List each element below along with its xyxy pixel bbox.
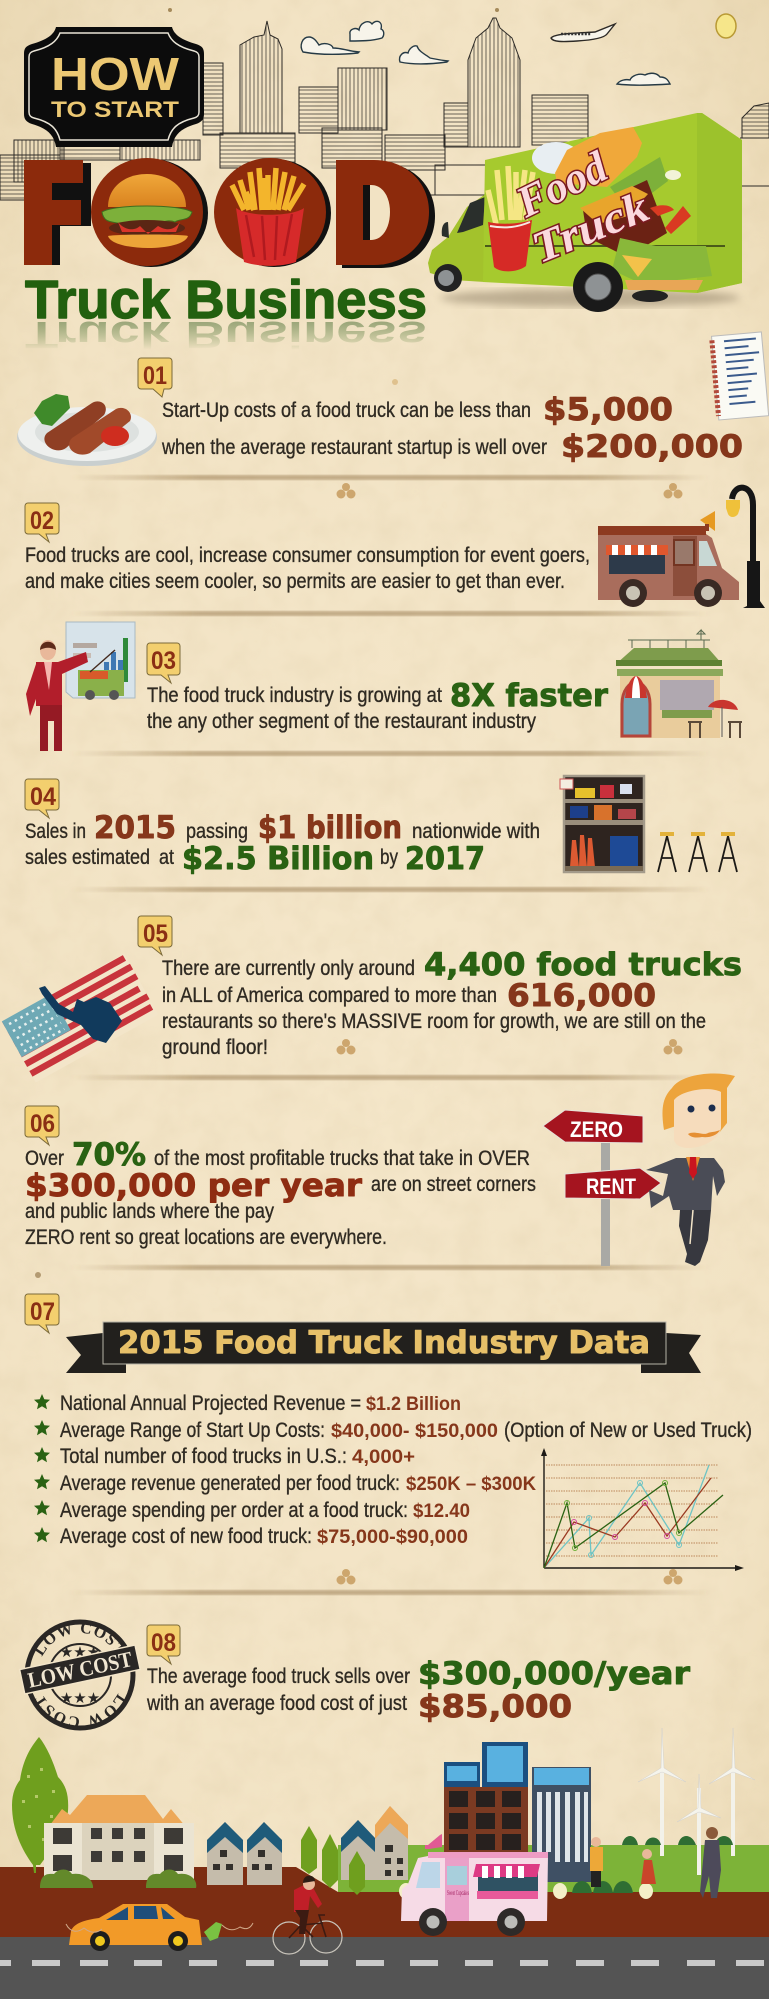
bullet list: 4,000+ — [352, 1447, 415, 1468]
text: sales line 1: $1 billion — [258, 810, 402, 846]
letter O with burger — [91, 158, 208, 267]
road dashes — [0, 1960, 764, 1966]
text: sales line 1: nationwide with — [412, 819, 540, 843]
icon: low cost stamp — [19, 1620, 140, 1730]
text: profit lines 2 to 4: ZERO rent so great locations are everywhere. — [25, 1225, 387, 1249]
text: growth line 2: the any other segment of the restaurant industry — [147, 709, 536, 733]
illustration: food truck — [428, 113, 742, 312]
icon: chart sheet — [66, 622, 135, 700]
bullet list: $12.40 — [413, 1501, 470, 1522]
city skyline sketch — [0, 18, 769, 200]
badge 07: 07 — [30, 1298, 55, 1326]
number: 5,000: $5,000 — [543, 392, 673, 428]
icon: restaurant — [616, 630, 742, 738]
text: sales line 2: sales estimated — [25, 845, 150, 869]
title words: truck business: Truck Business — [25, 314, 427, 356]
bullet list: $250K – $300K — [406, 1474, 536, 1495]
text: sales line 2: 2017 — [405, 841, 485, 877]
number: 85,000: $85,000 — [418, 1689, 572, 1725]
icon: stools — [658, 834, 737, 872]
text: profit line 1: 70% — [72, 1137, 146, 1173]
cyclist — [273, 1876, 342, 1954]
letter D — [336, 160, 435, 268]
badge 08: 08 — [151, 1629, 176, 1657]
text: permits: and make cities seem cooler, so permits are easier to get than ever. — [25, 569, 565, 593]
badge 05: 05 — [143, 920, 168, 948]
title word: FOOD — [24, 158, 435, 268]
line chart — [541, 1448, 744, 1571]
bullet list — [34, 1391, 752, 1548]
panel: 02 permits — [25, 488, 765, 608]
badge 01 — [138, 358, 172, 397]
panel: 04 sales — [25, 776, 737, 877]
title badge: how to start — [24, 27, 204, 147]
number: 616,000: 616,000 — [507, 978, 656, 1014]
truck wheels — [434, 262, 668, 312]
banner heading — [66, 1322, 701, 1373]
bullet list: National Annual Projected Revenue = — [60, 1391, 361, 1415]
pink food truck: Sweet Cupcakes — [447, 1889, 469, 1897]
badge 07 — [25, 1294, 59, 1333]
bullet stars — [34, 1394, 50, 1542]
text: sales line 2: by — [380, 845, 398, 869]
text: market line 3 and 4 — [162, 1009, 706, 1059]
badge 08 — [147, 1625, 180, 1664]
hedges and people — [399, 1827, 733, 1899]
banner heading: 2015 Food Truck Industry Data — [118, 1325, 650, 1361]
dividers — [70, 475, 710, 1595]
truck lettering — [508, 141, 656, 273]
title words: truck business: Truck Business — [25, 270, 427, 330]
icon: notepad — [712, 332, 769, 420]
panel: 06 profit — [25, 1073, 735, 1266]
icon: street lamp — [726, 488, 765, 608]
truck lettering: Food — [508, 141, 616, 228]
wind turbines — [638, 1728, 755, 1875]
badge 01: 01 — [143, 362, 167, 390]
badge 04: 04 — [30, 783, 56, 811]
icon: signpost — [543, 1110, 661, 1266]
text: market line 3 and 4: ground floor! — [162, 1035, 268, 1059]
number: 200,000: $200,000 — [561, 429, 743, 465]
text: market line 2: in ALL of America compared to more than — [162, 983, 497, 1007]
icon: businessman — [646, 1073, 735, 1266]
clouds, plane and sun — [301, 14, 736, 85]
bullet list: Total number of food trucks in U.S.: — [60, 1444, 347, 1468]
grass — [338, 1845, 769, 1895]
icon: american flag with statue of liberty — [2, 953, 158, 1083]
badge 03 — [147, 643, 180, 683]
text: sales line 1 — [25, 810, 540, 846]
small trees — [301, 1826, 365, 1895]
text: sales line 2 — [25, 841, 485, 877]
text: profit lines 2 to 4: and public lands where the pay — [25, 1199, 274, 1223]
icon: signpost: ZERO — [570, 1117, 623, 1142]
truck lettering: Truck — [525, 182, 656, 273]
cup and fries art — [488, 166, 533, 271]
icon: presenter — [26, 640, 115, 751]
panel: 08 food cost — [19, 1620, 691, 1730]
text: sales line 1: passing — [186, 819, 248, 843]
icon: brown food truck — [598, 511, 739, 607]
text: sales line 1: 2015 — [94, 810, 176, 846]
text: profit lines 2 to 4: are on street corners — [371, 1172, 536, 1196]
number: 300,000 per year: $300,000 per year — [25, 1168, 363, 1204]
badge 02 — [25, 503, 59, 542]
icon: shelves — [560, 776, 644, 872]
number: 300,000 per year: $300,000/year — [418, 1656, 691, 1692]
icon: signpost: RENT — [586, 1174, 636, 1199]
badge 06: 06 — [30, 1110, 55, 1138]
icon: low cost stamp: ★★★ — [60, 1689, 100, 1707]
text: sales line 2: at — [159, 845, 174, 869]
icon: low cost stamp: LOW COST — [25, 1646, 135, 1693]
bullet list: Average spending per order at a food truck: — [60, 1498, 408, 1522]
burger art — [532, 127, 712, 290]
panel: 07 industry data — [25, 1294, 752, 1571]
small houses — [207, 1806, 408, 1885]
text: startup cost line 1: Start-Up costs of a food truck can be less than — [162, 398, 531, 422]
number: 8x faster: 8X faster — [450, 678, 609, 714]
road — [0, 1937, 769, 1999]
panel: 01 startup costs — [17, 332, 769, 466]
big tree — [12, 1737, 68, 1873]
text: growth line 1: The food truck industry is growing at — [147, 683, 442, 707]
ground — [0, 1867, 769, 1938]
panel: 05 market size — [2, 916, 742, 1083]
badge 03: 03 — [151, 647, 176, 675]
number: 4,400 food trucks: 4,400 food trucks — [424, 947, 742, 983]
title words: truck business — [25, 270, 427, 356]
text: startup cost line 2: when the average restaurant startup is well over — [161, 435, 547, 459]
text: profit line 1 — [25, 1137, 530, 1173]
text: food cost line 1: The average food truck sells over — [147, 1664, 410, 1688]
badge 04 — [25, 779, 59, 818]
bullet list: $1.2 Billion — [366, 1394, 461, 1415]
letter O with fries — [214, 158, 331, 267]
icon: low cost stamp: LOW COST — [36, 1694, 124, 1726]
badge 05 — [138, 916, 172, 955]
panel: 03 growth — [26, 622, 742, 751]
letter F — [24, 160, 91, 265]
bullet list: Average cost of new food truck: — [60, 1524, 312, 1548]
badge 06 — [25, 1106, 59, 1145]
city street scene — [0, 1728, 769, 1999]
pink food truck — [401, 1834, 548, 1936]
bullet list: $40,000- $150,000 — [331, 1421, 498, 1442]
text: profit lines 2 to 4 — [25, 1172, 536, 1249]
icon: low cost stamp: LOW COST — [36, 1624, 122, 1656]
tall buildings — [444, 1742, 591, 1882]
text: market line 1: There are currently only around — [162, 956, 415, 980]
bullet list: $75,000-$90,000 — [317, 1527, 468, 1548]
icon: low cost stamp: ★★★ — [60, 1643, 100, 1661]
text: sales line 1: Sales in — [25, 819, 86, 843]
icon: plate of food — [17, 394, 157, 466]
text: food cost line 2: with an average food cost of just — [146, 1691, 407, 1715]
text: profit line 1: Over — [25, 1146, 64, 1170]
text: permits: Food trucks are cool, increase consumer consumption for event goers, — [25, 543, 590, 567]
title badge: how to start: TO START — [51, 97, 180, 122]
text: sales line 2: $2.5 Billion — [182, 841, 374, 877]
badge 02: 02 — [30, 507, 54, 535]
bullet list: Average Range of Start Up Costs: — [60, 1418, 325, 1442]
bullet list: Average revenue generated per food truck: — [60, 1471, 400, 1495]
orange car — [66, 1904, 253, 1951]
big house — [40, 1795, 196, 1888]
text: profit line 1: of the most profitable trucks that take in OVER — [154, 1146, 530, 1170]
title badge: how to start: HOW — [51, 48, 180, 100]
text: permits — [25, 543, 590, 593]
